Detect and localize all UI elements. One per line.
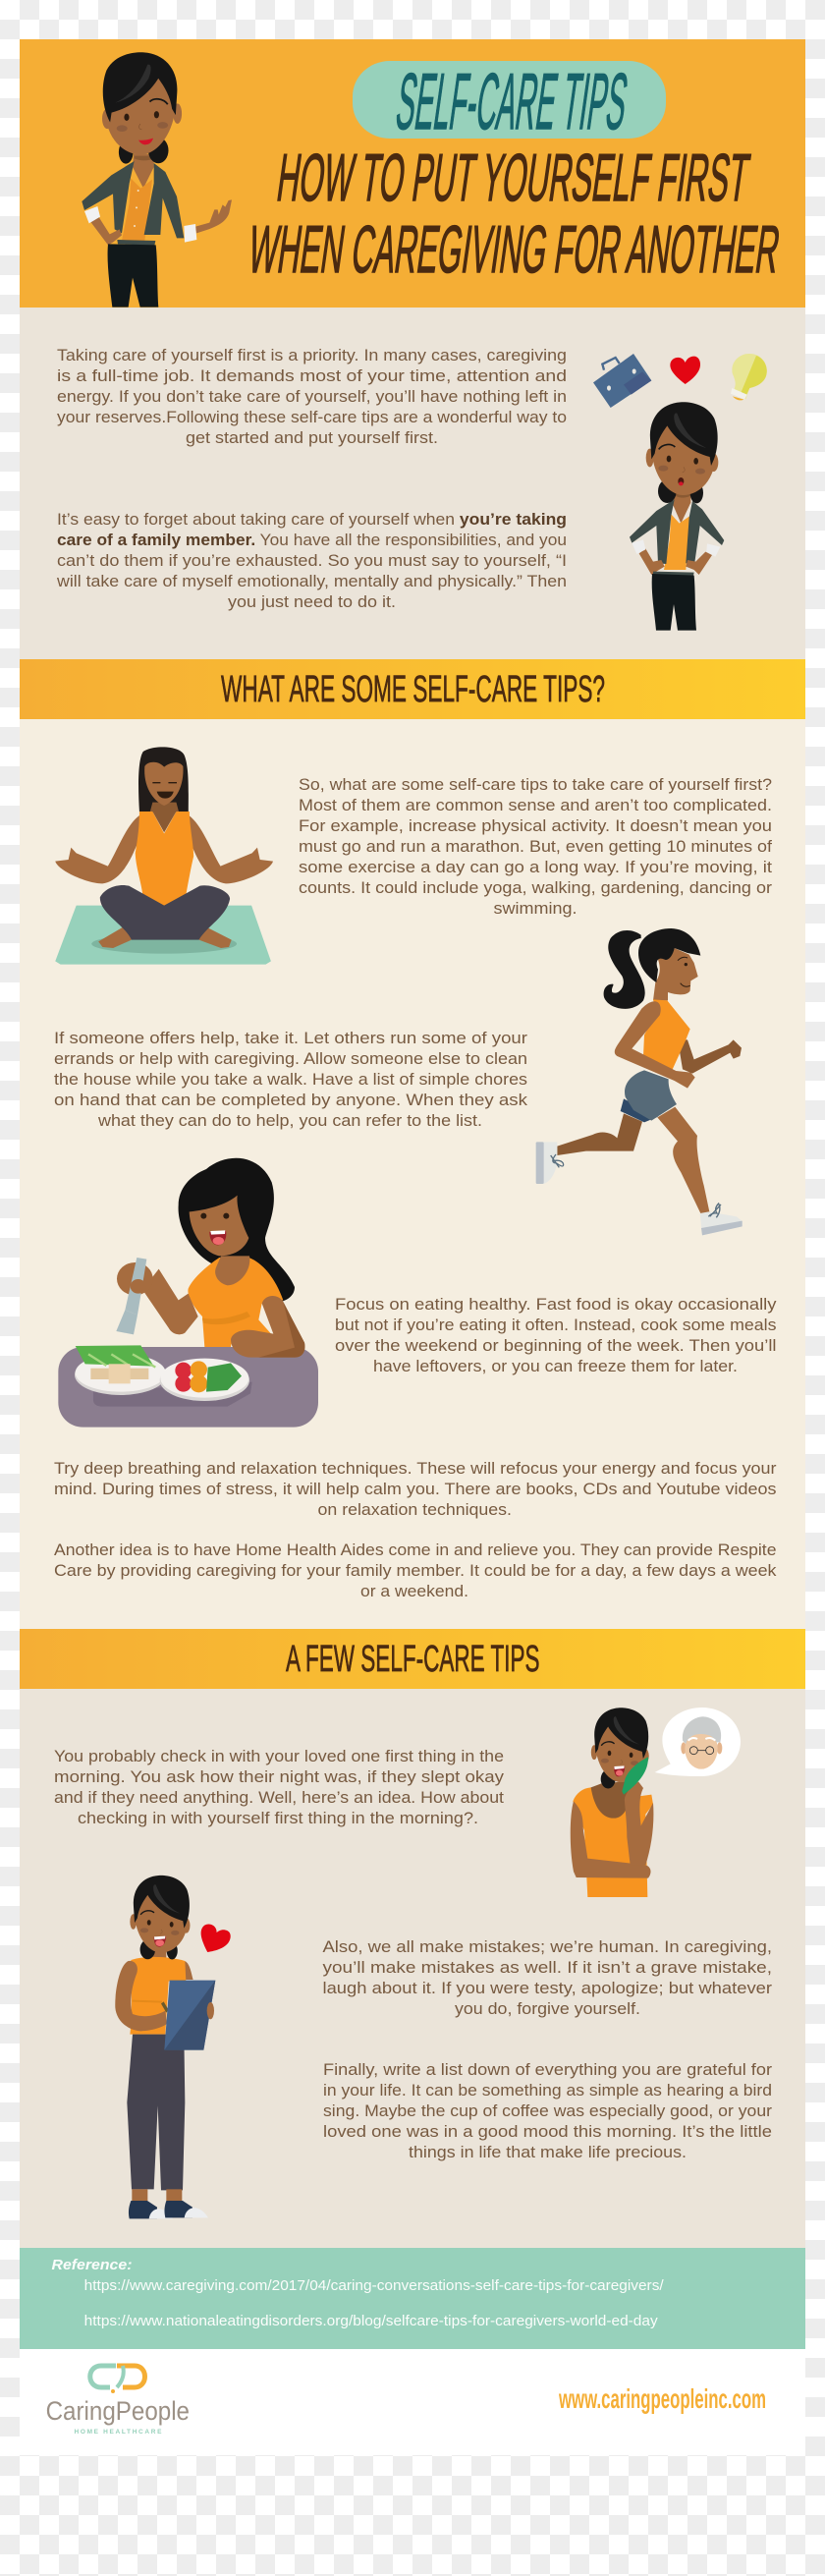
text block: gratitude list: things in life that make life precious. (409, 2143, 687, 2161)
section band: what are some self-care tips (20, 659, 805, 719)
text block: accept help: on hand that can be completed by anyone. When they ask (54, 1091, 528, 1109)
text block: check in with yourself: You probably check in with your loved one first thing in the (54, 1747, 504, 1765)
text block: physical activity (299, 775, 772, 918)
text block: easy to forget: care of a family member. You have all the responsibilities, and you (57, 531, 567, 549)
text block: taking care of yourself (57, 346, 567, 447)
reference links: https://www.nationaleatingdisorders.org/blog/selfcare-tips-for-caregivers-world-ed-day (84, 2313, 658, 2329)
panel: footer (20, 2349, 805, 2455)
panel: a few self-care tips section (20, 1689, 805, 2248)
text block: accept help: errands or help with caregiving. Allow someone else to clean (54, 1049, 527, 1068)
text block: home health aides: Care by providing caregiving for your family member. It could be for a day, a few days a week (54, 1561, 777, 1580)
text block: make mistakes: laugh about it. If you were testy, apologize; but whatever (322, 1979, 772, 1997)
reference label: Reference: (51, 2257, 132, 2273)
text block: taking care of yourself: get started and put yourself first. (186, 428, 438, 447)
text block: accept help: what they can do to help, you can refer to the list. (97, 1111, 482, 1130)
text block: easy to forget: you just need to do it. (228, 592, 396, 611)
illustration: woman on phone with speech bubble (571, 1708, 741, 1897)
illustration: woman eating at table (58, 1158, 318, 1428)
plate: tomatoes, peppers and greens (160, 1359, 249, 1401)
text block: deep breathing: Try deep breathing and relaxation techniques. These will refocus your energy and focus your (54, 1459, 777, 1478)
text block: taking care of yourself: your reserves.Following these self-care tips are a wonderful way to (57, 408, 567, 426)
text block: physical activity: some exercise a day can go a long way. If you’re moving, it (299, 858, 772, 876)
text block: make mistakes: Also, we all make mistakes; we’re human. In caregiving, (322, 1937, 772, 1956)
icon: heart (193, 1921, 233, 1958)
text block: physical activity: swimming. (493, 899, 578, 918)
text block: gratitude list: Finally, write a list down of everything you are grateful for (323, 2060, 772, 2079)
illustration: yoga pose on mat (55, 747, 273, 965)
text block: make mistakes: you do, forgive yourself. (455, 1999, 640, 2018)
section band: a few self-care tips (20, 1629, 805, 1689)
text block: easy to forget: can’t do them if you’re exhausted. So you must say to yourself, “I (57, 551, 567, 570)
reference links (84, 2277, 665, 2329)
reference links: https://www.caregiving.com/2017/04/caring-conversations-self-care-tips-for-caregivers/ (84, 2277, 665, 2294)
icon: briefcase (593, 354, 651, 408)
section band: a few self-care tips: A FEW SELF-CARE TIPS (286, 1639, 540, 1680)
logo: CaringPeople Home Healthcare: HOME HEALTHCARE (75, 2429, 162, 2436)
panel: header banner (20, 39, 805, 308)
text block: home health aides: or a weekend. (360, 1582, 468, 1600)
text block: eating healthy (335, 1295, 777, 1375)
text block: taking care of yourself: is a full-time job. It demands most of your time, attention and (57, 366, 567, 385)
plate: salad and tofu (75, 1345, 166, 1395)
speech bubble with elderly man (655, 1708, 741, 1776)
text block: easy to forget (56, 510, 567, 611)
text block: gratitude list: in your life. It can be something as simple as hearing a bird (323, 2081, 772, 2100)
text block: eating healthy: Focus on eating healthy. Fast food is okay occasionally (335, 1295, 777, 1314)
icon: heart (670, 357, 700, 384)
text block: easy to forget: will take care of myself emotionally, mentally and physically.” Then (56, 572, 567, 590)
text block: easy to forget: It’s easy to forget about taking care of yourself when you’re taking (57, 510, 567, 529)
text block: physical activity: For example, increase physical activity. It doesn’t mean you (299, 816, 772, 835)
text block: make mistakes: you’ll make mistakes as well. If it isn’t a grave mistake, (322, 1958, 772, 1977)
text block: taking care of yourself: energy. If you don’t take care of yourself, you’ll have nothing left in (57, 387, 567, 406)
text block: physical activity: So, what are some self-care tips to take care of yourself first? (299, 775, 772, 794)
text block: gratitude list: loved one was in a good mood this morning. It’s the little (323, 2122, 772, 2141)
text block: home health aides: Another idea is to have Home Health Aides come in and relieve you. They can provide Respite (54, 1540, 776, 1559)
text block: home health aides (54, 1540, 777, 1600)
text block: physical activity: must go and run a marathon. But, even getting 10 minutes of (299, 837, 772, 856)
text block: eating healthy: over the weekend or beginning of the week. Then you’ll (335, 1336, 776, 1355)
text block: accept help: If someone offers help, take it. Let others run some of your (54, 1029, 527, 1047)
text block: check in with yourself: and if they need anything. Well, here’s an idea. How about (54, 1788, 504, 1807)
text block: check in with yourself: checking in with yourself first thing in the morning?. (78, 1809, 478, 1827)
text block: deep breathing: mind. During times of stress, it will help calm you. There are books, CDs and Youtube videos (54, 1480, 776, 1498)
illustration: header woman gesturing (82, 52, 232, 308)
text block: make mistakes (322, 1937, 772, 2018)
title pill (353, 57, 666, 146)
text block: eating healthy: but not if you’re eating it often. Instead, cook some meals (335, 1316, 776, 1334)
text block: gratitude list (323, 2060, 772, 2161)
icon: light bulb (731, 354, 767, 400)
logo: CaringPeople Home Healthcare: CaringPeople (46, 2396, 190, 2426)
illustration: woman with hands on hips and icons above (593, 354, 767, 631)
text block: deep breathing (54, 1459, 777, 1519)
text block: taking care of yourself: Taking care of yourself first is a priority. In many cases, caregiving (57, 346, 567, 364)
text block: accept help (54, 1029, 528, 1130)
text block: gratitude list: sing. Maybe the cup of coffee was especially good, or your (323, 2101, 772, 2120)
text block: physical activity: Most of them are common sense and aren’t too complicated. (299, 796, 772, 814)
text block: deep breathing: on relaxation techniques. (318, 1500, 512, 1519)
illustration: woman with clipboard and heart (115, 1876, 233, 2218)
text block: physical activity: counts. It could include yoga, walking, gardening, dancing or (299, 878, 772, 897)
text block: eating healthy: have leftovers, or you can freeze them for later. (373, 1357, 738, 1375)
illustration: running woman (536, 928, 742, 1235)
panel: intro section (20, 308, 805, 659)
text block: check in with yourself: morning. You ask how their night was, if they slept okay (54, 1767, 505, 1786)
panel: reference section (20, 2248, 805, 2349)
text block: check in with yourself (54, 1747, 505, 1827)
panel: what are some self-care tips section (20, 719, 805, 1629)
logo: CaringPeople Home Healthcare (46, 2366, 190, 2436)
text block: accept help: the house while you take a walk. Have a list of simple chores (54, 1070, 527, 1089)
